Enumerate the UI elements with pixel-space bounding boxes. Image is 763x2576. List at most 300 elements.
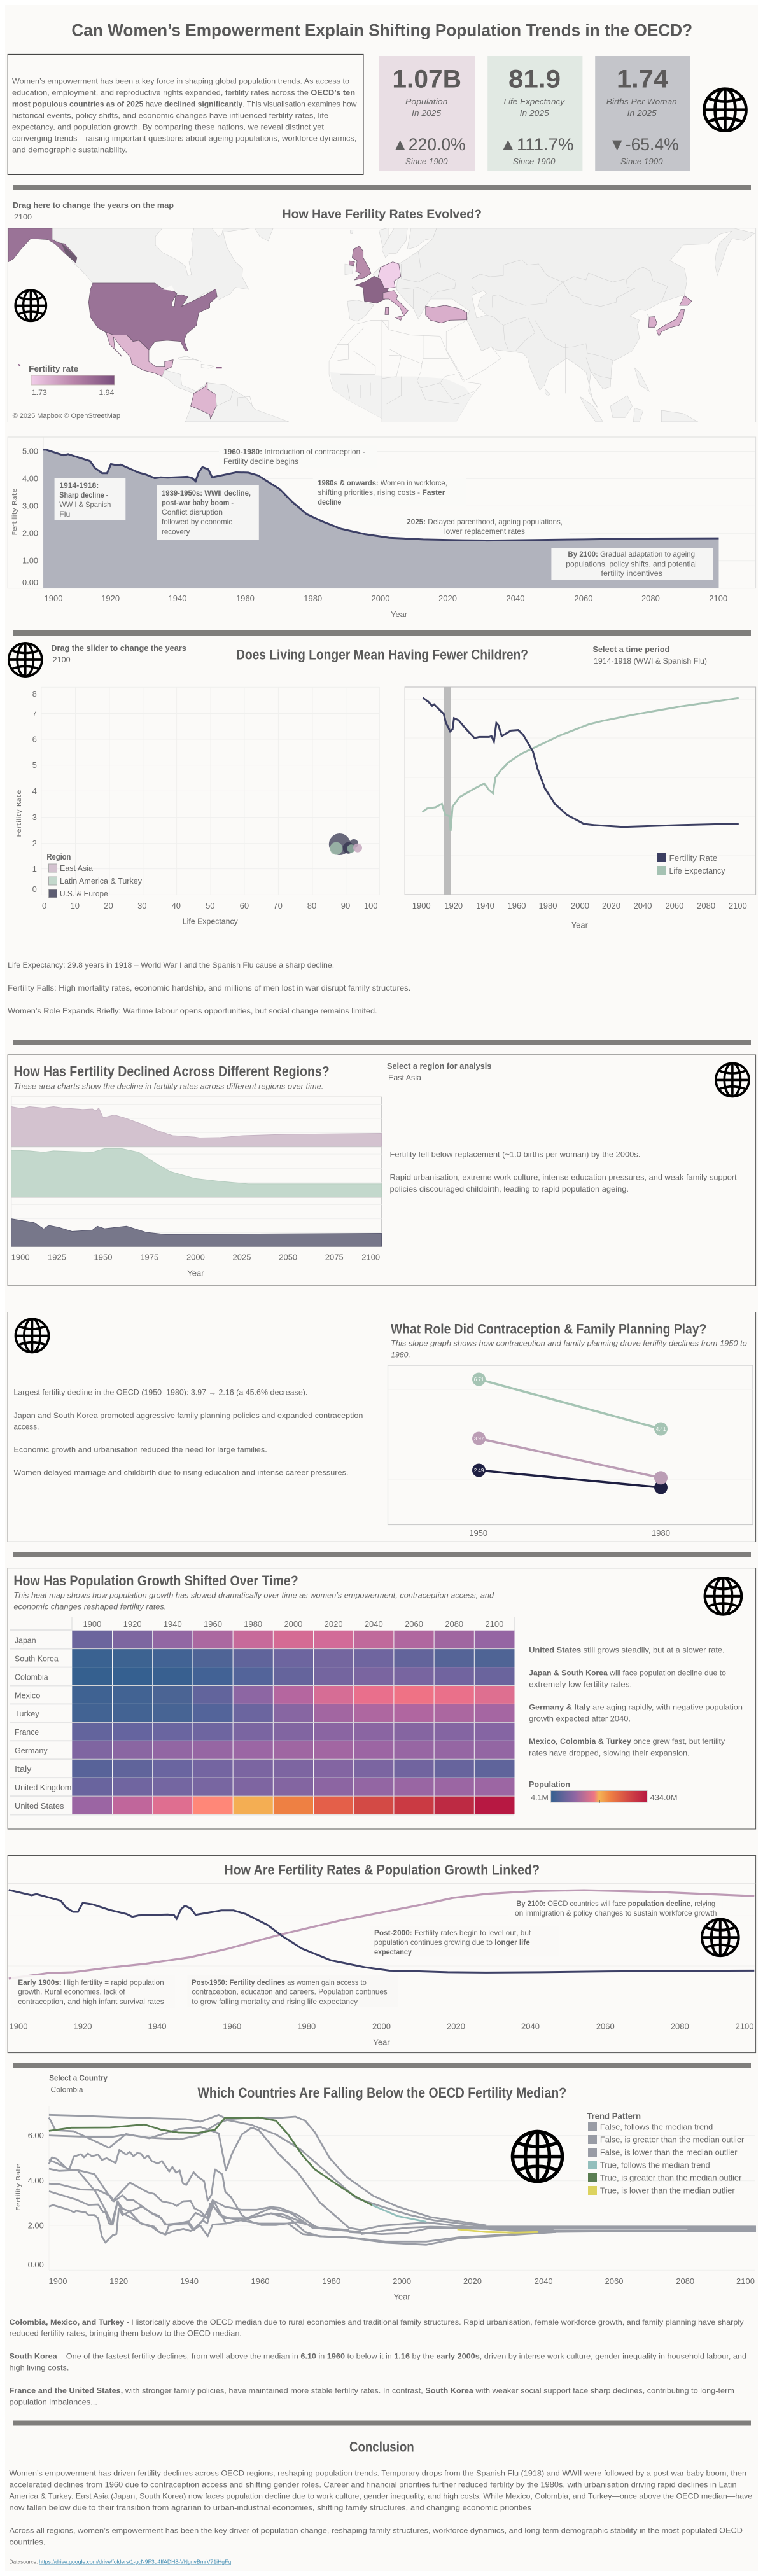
x axis labels: 2060	[575, 594, 592, 603]
heading: conclusion: Conclusion	[349, 2439, 414, 2455]
heat map years: 2080	[445, 1619, 463, 1629]
legend: Life Expectancy	[669, 866, 725, 875]
panel: population KPI card	[379, 56, 475, 171]
chart: fertility and life expectancy over time	[405, 687, 756, 930]
annotation: post-2000	[370, 1926, 559, 1957]
heat map years: 2040	[365, 1619, 383, 1629]
x axis labels: 2050	[279, 1252, 297, 1262]
y axis labels: 3.00	[22, 501, 38, 510]
heat map country labels: Germany	[15, 1746, 48, 1755]
x axis labels: Year	[571, 920, 589, 930]
heat map years: 1940	[164, 1619, 182, 1629]
text block: population growth findings: extremely low fertility rates.	[529, 1680, 632, 1689]
text block: country commentary: South Korea – One of the fastest fertility declines, from well above the median in 6.10 in 1960 to below it in 1.16 by the early 2000s , driven by intense work culture, gender inequality in household labour, and	[9, 2351, 746, 2360]
heat map years: 2060	[405, 1619, 423, 1629]
map filter label: 2100	[14, 212, 32, 221]
annotation: 1960-1980	[219, 445, 377, 468]
icon: globe	[512, 2132, 563, 2182]
icon: globe	[705, 1578, 741, 1615]
x axis labels: 2025	[233, 1252, 251, 1262]
x axis labels: 2000	[372, 2022, 391, 2031]
x axis labels: 1900	[11, 1252, 30, 1262]
x axis labels: 2000	[372, 594, 389, 603]
annotation: 1914-1918: Sharp decline -	[59, 491, 108, 499]
population legend: 434.0M	[650, 1793, 677, 1802]
x axis labels: 2080	[697, 901, 715, 910]
x axis labels: 1940	[180, 2276, 199, 2286]
region selector: Select a region for analysis	[387, 1061, 491, 1071]
x axis labels: 2040	[521, 2022, 540, 2031]
region selector: East Asia	[388, 1073, 421, 1082]
x axis labels	[10, 2022, 753, 2047]
time period selector	[592, 644, 707, 665]
annotation: early 1900s: growth. Rural economies, lack of	[18, 1988, 125, 1996]
heading: How Has Population Growth Shifted Over Time?	[13, 1573, 298, 1589]
annotation: post-2000: Post-2000: Fertility rates begin to level out, but	[374, 1928, 531, 1937]
trend pattern legend: True, follows the median trend	[600, 2161, 710, 2169]
y axis labels: 4.00	[22, 473, 38, 483]
heat map country labels: United Kingdom	[15, 1783, 71, 1792]
heading: How Are Fertility Rates & Population Growth Linked?	[224, 1862, 540, 1877]
subtitle: economic changes reshaped fertility rates.	[13, 1602, 166, 1611]
x axis labels: 1960	[251, 2276, 269, 2286]
annotation: by 2100	[551, 548, 713, 580]
annotation: by 2100: By 2100: OECD countries will face population decline, relying	[516, 1899, 715, 1908]
x axis labels: 2000	[571, 901, 589, 910]
heading: fertility rates: How Have Ferility Rates Evolved?	[283, 208, 482, 221]
annotation: 1939-1950s: recovery	[162, 527, 190, 536]
x axis labels: 1960	[236, 594, 255, 603]
annotation: by 2100	[508, 1897, 723, 1918]
panel: introduction text: expectancy, and population growth. By comparing these nations, we reveal distinct yet	[12, 122, 325, 131]
y axis labels: 0.00	[22, 578, 38, 587]
x axis labels: 0	[42, 901, 46, 910]
annotation: 1914-1918	[55, 478, 125, 520]
x axis labels: 30	[137, 901, 147, 910]
y axis labels: 4	[32, 786, 37, 796]
x axis labels: 1950	[94, 1252, 112, 1262]
panel: fertility and population growth link	[8, 1855, 756, 2053]
text block: 1914-1918 notes: Fertility Falls: High mortality rates, economic hardship, and millions of men lost in war disrupt family structures.	[8, 984, 410, 992]
panel: population KPI card: Since 1900	[405, 157, 448, 166]
icon: globe	[702, 1919, 739, 1956]
trend pattern legend: False, follows the median trend	[600, 2122, 713, 2131]
country selector: Select a Country	[49, 2073, 108, 2083]
y axis labels: 6.00	[28, 2131, 44, 2140]
heat map years: 1900	[83, 1619, 101, 1629]
x axis labels	[11, 1252, 380, 1278]
x axis labels: 90	[341, 901, 350, 910]
x axis labels: 2040	[535, 2276, 553, 2286]
annotation: 1939-1950s: post-war baby boom -	[162, 498, 234, 507]
icon: globe	[9, 643, 42, 676]
annotation: by 2100: populations, policy shifts, and potential	[566, 559, 697, 568]
map attribution: © 2025 Mapbox © OpenStreetMap	[13, 412, 120, 420]
text block: conclusion: Women’s empowerment has driven fertility declines across OECD regions, reshaping population trends. Temporary drops from the Spanish Flu (1918) and WWII were followed by a post-war baby boom, then	[9, 2468, 746, 2477]
trend pattern legend: False, is greater than the median outlier	[600, 2135, 745, 2144]
map legend: 1.73	[32, 388, 47, 397]
chart: slope graph	[388, 1365, 753, 1538]
y axis labels: 4.00	[28, 2176, 44, 2185]
text block: conclusion: America & Turkey. East Asia (Japan, South Korea) now faces population decline due to work culture, gender inequality, and high costs. While Mexico, Colombia, and Turkey—once above the OECD median—have	[9, 2491, 753, 2500]
panel: introduction text: Women’s empowerment has been a key force in shaping global population trends. As access to	[12, 76, 349, 85]
panel: introduction text: historical events, policy shifts, and economic changes have influenced fertility rates, life	[12, 111, 328, 120]
region legend: U.S. & Europe	[60, 889, 108, 898]
annotation: 1939-1950s: Conflict disruption	[162, 508, 223, 517]
y axis labels: 3	[32, 812, 37, 822]
x axis labels: 1900	[10, 2022, 27, 2031]
trend pattern legend: True, is greater than the median outlier	[600, 2173, 742, 2182]
x axis labels: 20	[104, 901, 113, 910]
text block: conclusion: accelerated declines from 1960 due to contraception access and shifting gender roles. Career and financial priorities further reduced fertility by the 1980s, with urbanisation driving rapid declines in Latin	[9, 2480, 737, 2489]
y axis labels: 2.00	[22, 529, 38, 538]
x axis labels: 1940	[476, 901, 494, 910]
annotation: 2025: 2025: Delayed parenthood, ageing populations,	[407, 517, 563, 526]
text block: population growth findings: United States still grows steadily, but at a slower rate.	[529, 1645, 725, 1654]
trend pattern legend: False, is lower than the median outlier	[600, 2148, 738, 2157]
x axis labels: 10	[71, 901, 80, 910]
icon: globe	[15, 290, 46, 321]
panel: life expectancy KPI card: ▲111.7%	[500, 135, 574, 154]
annotation: by 2100: fertility incentives	[601, 569, 662, 578]
annotation: post-1950: to grow falling mortality and rising life expectancy	[192, 1997, 358, 2006]
heading: What Role Did Contraception & Family Planning Play?	[391, 1321, 706, 1337]
panel: population KPI card: 1.07B	[392, 65, 461, 93]
x axis labels: 2020	[447, 2022, 465, 2031]
x axis labels: 2075	[325, 1252, 344, 1262]
panel: OECD fertility area chart	[8, 437, 756, 619]
x axis labels	[49, 2276, 755, 2302]
text block: country commentary: France and the United States, with stronger family policies, have maintained more stable fertility rates. In contrast, South Korea with weaker social support face sharp declines, contributing to long-term	[9, 2386, 734, 2395]
annotation: post-1950: Post-1950: Fertility declines as women gain access to	[192, 1978, 367, 1987]
y axis labels: 6	[32, 734, 37, 744]
text block: country commentary	[9, 2318, 746, 2406]
panel: births per woman KPI card: ▼-65.4%	[609, 135, 679, 154]
annotation: early 1900s: contraception, and high infant survival rates	[18, 1997, 164, 2006]
x axis labels: 2060	[605, 2276, 623, 2286]
heat map country labels: South Korea	[15, 1654, 59, 1663]
annotation: 2025: lower replacement rates	[444, 527, 525, 536]
panel: population KPI card: In 2025	[412, 108, 442, 118]
y axis labels: Fertility Rate	[15, 2164, 22, 2211]
text block: East Asia analysis: Fertility fell below replacement (~1.0 births per woman) by the 2000s.	[389, 1150, 640, 1159]
y axis labels: 7	[32, 709, 37, 718]
map legend: Fertility rate	[29, 364, 78, 373]
x axis labels: 70	[273, 901, 283, 910]
panel: introduction text: and demographic sustainability.	[12, 145, 127, 154]
x axis labels: 2060	[596, 2022, 615, 2031]
panel: introduction text: education, employment, and reproductive rights expanded, fertility rates across the OECD’s ten	[12, 88, 355, 97]
map filter label	[13, 200, 174, 221]
x axis labels: 2040	[634, 901, 652, 910]
x axis labels: 100	[364, 901, 378, 910]
x axis labels: 50	[206, 901, 215, 910]
x axis labels: 80	[307, 901, 316, 910]
chart: country fertility lines vs median	[15, 2106, 759, 2302]
text block: country commentary: reduced fertility rates, bringing them below to the OECD median.	[9, 2329, 242, 2337]
region legend: East Asia	[60, 863, 94, 873]
x axis labels: 1940	[148, 2022, 166, 2031]
x axis labels: 2100	[709, 594, 727, 603]
x axis labels: 1960	[508, 901, 526, 910]
x axis labels: 2000	[393, 2276, 411, 2286]
country selector	[49, 2073, 108, 2094]
panel: life expectancy KPI card: 81.9	[508, 65, 561, 93]
chart: life expectancy vs fertility scatter	[16, 687, 379, 926]
data source: https://drive.google.com/drive/folders/1-gcN9F3u4IfADH8-VNgnvBmrV71iHgFq	[39, 2559, 231, 2565]
x axis labels: 2080	[641, 594, 660, 603]
x axis labels: 1980	[539, 901, 557, 910]
x axis labels: 2060	[665, 901, 683, 910]
x axis labels: Year	[373, 2037, 390, 2047]
x axis labels: 2020	[438, 594, 457, 603]
heading: living longer: Does Living Longer Mean Having Fewer Children?	[236, 646, 528, 663]
x axis labels: 2020	[602, 901, 620, 910]
subtitle	[13, 1591, 494, 1611]
x axis labels: 1980	[297, 2022, 316, 2031]
panel: regional fertility decline	[8, 1055, 756, 1286]
heading: OECD fertility median: Which Countries Are Falling Below the OECD Fertility Median?	[197, 2085, 566, 2101]
annotation: 1914-1918: 1914-1918:	[59, 481, 99, 490]
text block: country commentary: Colombia, Mexico, and Turkey - Historically above the OECD median due to rural economies and traditional family structures. Rapid urbanisation, female workforce growth, and family planning have sharply	[9, 2318, 743, 2327]
text block: population growth findings: rates have dropped, slowing their expansion.	[529, 1748, 690, 1757]
heat map years: 2100	[485, 1619, 503, 1629]
text block: East Asia analysis: policies discouraged childbirth, leading to rapid population ageing.	[389, 1185, 629, 1194]
panel: births per woman KPI card	[595, 56, 690, 171]
heat map country labels: Turkey	[15, 1709, 39, 1718]
text block: 1914-1918 notes: Women’s Role Expands Briefly: Wartime labour opens opportunities, but social change remains limited.	[8, 1006, 377, 1015]
x axis labels: 1980	[304, 594, 322, 603]
y axis labels: 1.00	[22, 556, 38, 566]
annotation: by 2100: on immigration & policy changes to sustain workforce growth	[515, 1909, 717, 1918]
time period selector: Select a time period	[592, 644, 669, 654]
heat map years: 1980	[244, 1619, 262, 1629]
population legend	[529, 1779, 677, 1803]
text block: contraception findings: Largest fertility decline in the OECD (1950–1980): 3.97 → 2.16 (a 45.6% decrease).	[13, 1388, 307, 1396]
y axis labels	[15, 2131, 44, 2269]
text block: population growth findings: Mexico, Colombia & Turkey once grew fast, but fertility	[529, 1737, 725, 1746]
chart: slope graph: 2.49	[474, 1468, 484, 1473]
panel: population growth heat map	[8, 1568, 756, 1829]
y axis labels: 5	[32, 760, 37, 770]
text block: conclusion: now fallen below due to their transition from agrarian to urban-industrial economies, shifting family structures, and changing economic priorities	[9, 2503, 531, 2512]
panel: population KPI card: ▲220.0%	[392, 135, 466, 154]
heat map country labels: United States	[15, 1801, 64, 1811]
text block: contraception findings: Women delayed marriage and childbirth due to rising education and intense career pressures.	[13, 1468, 348, 1477]
x axis labels: 2100	[736, 2276, 755, 2286]
text block: country commentary: high living costs.	[9, 2363, 69, 2372]
annotation: 1980s onwards: 1980s & onwards: Women in workforce,	[318, 478, 447, 487]
text block: contraception findings: access.	[13, 1423, 39, 1431]
icon: globe	[716, 1063, 749, 1096]
x axis labels: 1975	[140, 1252, 158, 1262]
x axis labels: 2080	[671, 2022, 689, 2031]
text block: contraception findings: Japan and South Korea promoted aggressive family planning policies and expanded contraception	[13, 1411, 363, 1420]
country selector: Colombia	[51, 2085, 83, 2094]
map legend: 1.94	[99, 388, 115, 397]
data source: Datasource:	[9, 2559, 38, 2565]
subtitle: 1980.	[391, 1350, 410, 1359]
heat map years: 1960	[204, 1619, 222, 1629]
x axis labels: 1900	[49, 2276, 67, 2286]
x axis labels: 60	[240, 901, 249, 910]
icon: globe	[704, 89, 746, 131]
text block: East Asia analysis: Rapid urbanisation, extreme work culture, intense education pressures, and weak family support	[389, 1173, 737, 1182]
population legend: 4.1M	[531, 1793, 549, 1802]
x axis labels	[412, 901, 747, 930]
text block: conclusion: countries.	[9, 2537, 46, 2546]
legend: Fertility Rate	[669, 853, 717, 863]
heat map country labels: Japan	[15, 1635, 36, 1645]
panel: life expectancy KPI card: Since 1900	[513, 157, 556, 166]
heat map years	[72, 1617, 515, 1631]
chart: slope graph: 1950	[469, 1528, 487, 1538]
text block: East Asia analysis	[389, 1150, 737, 1194]
panel: introduction text	[8, 54, 363, 174]
chart: slope graph: 4.41	[656, 1426, 666, 1432]
y axis labels: 2	[32, 839, 37, 848]
chart: slope graph: 6.71	[474, 1377, 484, 1382]
heat map cells	[72, 1630, 515, 1814]
slider label	[51, 643, 186, 664]
bubbles	[329, 833, 362, 855]
panel: life expectancy KPI card: In 2025	[520, 108, 550, 118]
chart: dual line	[9, 1890, 754, 1979]
x axis labels: Life Expectancy	[183, 916, 238, 926]
map filter label: Drag here to change the years on the map	[13, 200, 174, 210]
slider label: 2100	[53, 655, 71, 664]
x axis labels	[45, 594, 727, 619]
text block: population growth findings: Japan & South Korea will face population decline due to	[529, 1668, 726, 1677]
population legend: Population	[529, 1779, 570, 1789]
x axis labels: 1920	[444, 901, 463, 910]
x axis labels: Year	[187, 1269, 204, 1278]
annotation: 1980s onwards	[313, 478, 466, 506]
x axis labels: 1920	[101, 594, 120, 603]
x axis labels: 2100	[729, 901, 747, 910]
text block: 1914-1918 notes: Life Expectancy: 29.8 years in 1918 – World War I and the Spanish Flu cause a sharp decline.	[8, 961, 334, 970]
x axis labels: 2100	[361, 1252, 380, 1262]
y axis labels	[11, 447, 38, 587]
panel: introduction text: converging trends—raising important questions about ageing populations, workforce dynamics,	[12, 134, 356, 143]
annotation: early 1900s: Early 1900s: High fertility = rapid population	[18, 1978, 164, 1987]
time period selector: 1914-1918 (WWI & Spanish Flu)	[594, 657, 707, 665]
annotation: post-1950	[187, 1975, 398, 2007]
annotation: 1960-1980: Fertility decline begins	[223, 457, 298, 466]
y axis labels: 5.00	[22, 447, 38, 456]
slider label: Drag the slider to change the years	[51, 643, 186, 653]
region legend: Region	[46, 852, 71, 861]
annotation: 1939-1950s: followed by economic	[162, 517, 232, 526]
annotation: post-2000: population continues growing due to longer life	[374, 1938, 530, 1947]
panel: births per woman KPI card: Births Per Woman	[606, 97, 677, 106]
y axis labels: 8	[32, 689, 37, 699]
annotation: 1960-1980: 1960-1980: Introduction of contraception -	[223, 447, 365, 456]
panel: births per woman KPI card: Since 1900	[620, 157, 663, 166]
y axis labels: Fertility Rate	[11, 488, 18, 536]
subtitle: This heat map shows how population growth has slowed dramatically over time as women’s empowerment, contraception access, and	[13, 1591, 494, 1599]
icon: globe	[15, 1319, 49, 1352]
x axis labels: 1940	[169, 594, 186, 603]
panel: births per woman KPI card: 1.74	[617, 65, 669, 93]
region selector	[387, 1061, 491, 1082]
trend pattern legend	[587, 2111, 745, 2195]
text block: contraception findings	[13, 1388, 363, 1477]
x axis labels: 2100	[736, 2022, 753, 2031]
title: Can Women’s Empowerment Explain Shifting Population Trends in the OECD?	[71, 20, 692, 39]
annotation: early 1900s	[11, 1975, 175, 2008]
panel: fertility choropleth map	[8, 228, 756, 422]
heat map years: 2020	[325, 1619, 343, 1629]
region legend: Latin America & Turkey	[60, 876, 142, 886]
x axis labels: 1920	[109, 2276, 128, 2286]
x axis labels: 1900	[45, 594, 62, 603]
panel: births per woman KPI card: In 2025	[627, 108, 657, 118]
heat map country labels: Italy	[15, 1764, 32, 1774]
x axis labels: 2020	[463, 2276, 482, 2286]
x axis labels: 1925	[48, 1252, 66, 1262]
heading: How Has Fertility Declined Across Different Regions?	[13, 1063, 330, 1079]
annotation: by 2100: By 2100: Gradual adaptation to ageing	[568, 550, 695, 559]
annotation: 1914-1918: WW I & Spanish	[59, 500, 111, 509]
x axis labels: 1920	[74, 2022, 92, 2031]
chart: slope graph: 3.97	[474, 1436, 484, 1442]
x axis labels: 40	[172, 901, 181, 910]
subtitle: These area charts show the decline in fertility rates across different regions over time.	[13, 1082, 323, 1090]
y axis labels: 2.00	[28, 2220, 44, 2231]
x axis labels: 1960	[223, 2022, 241, 2031]
text block: conclusion: Across all regions, women’s empowerment has been the key driver of population change, reshaping family structures, workforce dynamics, and long-term demographic stability in the most populated OECD	[9, 2526, 743, 2535]
subtitle	[391, 1339, 747, 1359]
annotation: 1914-1918: Flu	[59, 510, 70, 519]
map legend	[29, 364, 115, 397]
text block: population growth findings: Germany & Italy are aging rapidly, with negative population	[529, 1703, 743, 1712]
text block: 1914-1918 notes	[8, 961, 410, 1015]
x axis labels: 2000	[186, 1252, 205, 1262]
x axis labels: 1980	[322, 2276, 340, 2286]
panel: life expectancy KPI card: Life Expectancy	[504, 97, 566, 106]
text block: country commentary: population imbalances...	[9, 2397, 97, 2406]
text block: population growth findings: growth expected after 2040.	[529, 1714, 631, 1723]
panel: life expectancy KPI card	[487, 56, 582, 171]
heat map years: 2000	[284, 1619, 302, 1629]
chart: regional area charts	[11, 1097, 382, 1246]
text block: population growth findings	[529, 1645, 743, 1757]
heat map country labels: Colombia	[15, 1672, 48, 1681]
panel: introduction text: most populous countries as of 2025 have declined significantly. This visualisation examines how	[12, 99, 357, 108]
x axis labels: 2040	[507, 594, 524, 603]
annotation: 1939-1950s: 1939-1950s: WWII decline,	[162, 489, 251, 498]
annotation: 2025	[400, 517, 570, 536]
heat map years: 1920	[123, 1619, 142, 1629]
y axis labels: Fertility Rate	[16, 790, 23, 837]
x axis labels: Year	[391, 609, 408, 619]
x axis labels: 1900	[412, 901, 431, 910]
chart: slope graph: 1980	[652, 1528, 670, 1538]
subtitle: This slope graph shows how contraception and family planning drove fertility declines from 1950 to	[391, 1339, 747, 1348]
annotation: 1939-1950s	[157, 485, 259, 540]
trend pattern legend: True, is lower than the median outlier	[600, 2186, 735, 2195]
panel: population KPI card: Population	[405, 97, 448, 106]
annotation: 1980s onwards: decline	[318, 498, 342, 506]
annotation: 1980s onwards: shifting priorities, rising costs - Faster	[318, 488, 445, 497]
annotation: post-1950: contraception, education and careers. Population continues	[192, 1988, 388, 1996]
heat map country labels	[10, 1630, 514, 1814]
x axis labels: 2080	[676, 2276, 694, 2286]
heat map country labels: France	[15, 1727, 39, 1737]
panel: contraception and family planning	[8, 1312, 756, 1542]
text block: contraception findings: Economic growth and urbanisation reduced the need for large families.	[13, 1445, 267, 1454]
